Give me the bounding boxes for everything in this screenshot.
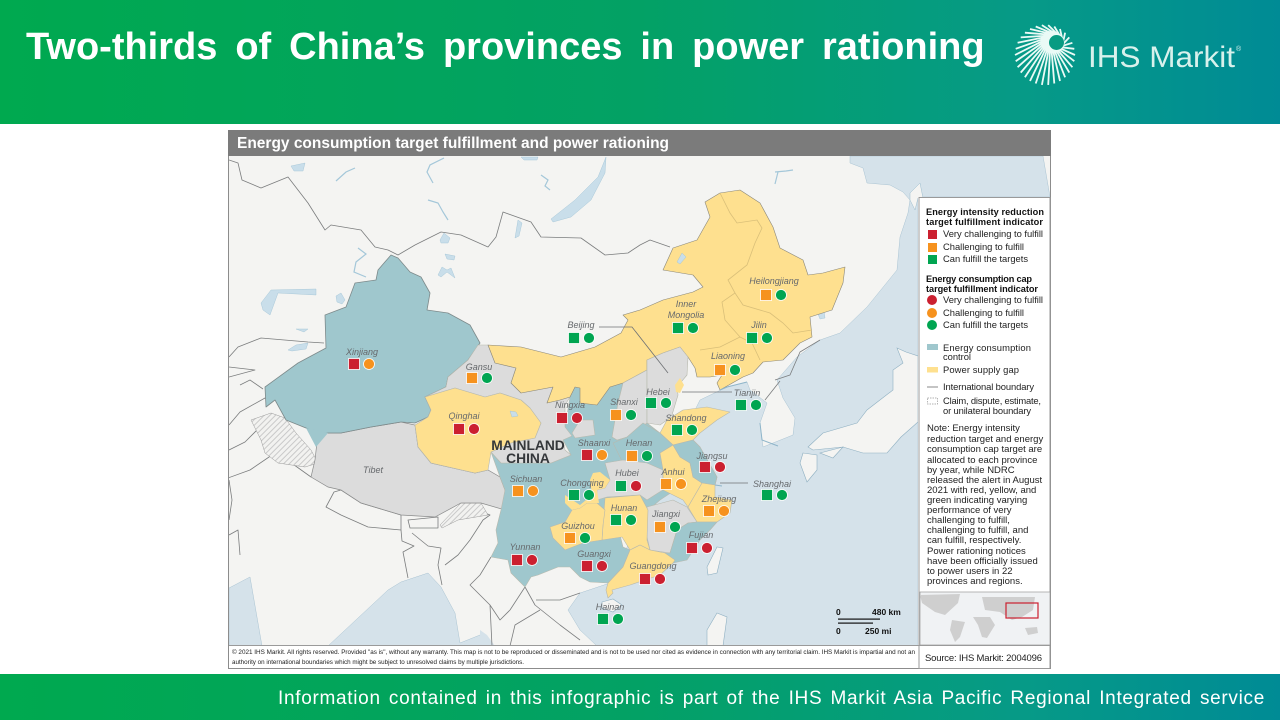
Jiangxi: grey (647, 500, 697, 553)
label: MAINLAND CHINA: MAINLAND (491, 438, 565, 453)
Fujian: teal (665, 522, 717, 563)
copyright note (229, 645, 919, 668)
legend: note: can fulfill, respectively. (927, 535, 1021, 546)
legend: boundaries (927, 381, 1041, 416)
Hainan island (602, 599, 622, 612)
marker: Tianjin (734, 388, 762, 410)
disputed areas hatched (251, 413, 488, 528)
legend: note: performance of very (927, 505, 1012, 516)
legend panel (919, 198, 1050, 668)
legend: energy intensity squares: Challenging to fulfill (943, 241, 1024, 252)
map panel (228, 130, 1051, 668)
Qinghai: yellow (415, 388, 541, 473)
marker: Gansu (466, 362, 492, 384)
Zhejiang: yellow (688, 483, 732, 522)
marker: Inner Mongolia: Mongolia (668, 310, 704, 320)
legend: energy intensity squares: Very challenging to fulfill (943, 228, 1043, 239)
marker: Hainan: Hainan (596, 602, 624, 612)
base map (228, 156, 1051, 646)
marker: Qinghai (448, 411, 481, 434)
Henan: teal (612, 422, 673, 460)
legend: energy intensity squares: target fulfillment indicator (926, 217, 1043, 227)
marker: Xinjiang: Xinjiang (345, 347, 378, 357)
marker: Hainan (596, 602, 624, 624)
legend: area colours: Power supply gap (943, 364, 1019, 375)
footer band (0, 674, 1280, 720)
logo: IHS Markit: IHS Markit (1088, 41, 1236, 74)
source (919, 646, 1050, 664)
legend: note: released the alert in August (927, 475, 1042, 486)
logo: IHS Markit: ® (1236, 45, 1242, 53)
marker: Guangdong (629, 561, 677, 584)
marker: Liaoning: Liaoning (711, 351, 745, 361)
header band (0, 0, 1280, 124)
marker: Shandong: Shandong (665, 413, 707, 423)
legend: note: 2021 with red, yellow, and (927, 485, 1036, 496)
label: Tibet: Tibet (363, 465, 383, 475)
legend: note: challenging to fulfill, and (927, 525, 1028, 536)
legend: note: to power users in 22 (927, 566, 1013, 577)
marker: Guangxi (577, 549, 612, 572)
Guizhou: yellow (550, 503, 605, 550)
marker: Zhejiang: Zhejiang (701, 494, 736, 504)
marker: Shanghai (753, 479, 792, 500)
marker: Shanxi (610, 397, 639, 420)
marker: Hubei (615, 468, 642, 492)
legend: area colours: control (943, 351, 971, 362)
marker: Hebei (646, 387, 672, 408)
legend: energy cap circles: Very challenging to fulfill (943, 294, 1043, 305)
central teal base (491, 383, 717, 587)
legend: energy cap circles: Challenging to fulfill (943, 307, 1024, 318)
marker: Yunnan: Yunnan (510, 542, 540, 552)
marker: Hunan: Hunan (611, 503, 637, 513)
legend: energy cap circles (926, 274, 1043, 330)
legend: note: allocated to each province (927, 455, 1037, 466)
Gulf of Thailand (480, 630, 494, 645)
marker: Hebei: Hebei (646, 387, 671, 397)
Taiwan (707, 547, 723, 575)
legend: energy intensity squares: Can fulfill the targets (943, 253, 1028, 264)
Gansu lobe: grey (572, 420, 595, 438)
label: MAINLAND CHINA: CHINA (506, 451, 550, 466)
scale bar (836, 607, 901, 636)
China provinces (265, 190, 845, 598)
legend: energy intensity squares: Energy intensity reduction (926, 207, 1044, 217)
panel heading bar: Energy consumption target fulfillment and power rationing (237, 135, 669, 152)
label: MAINLAND CHINA (491, 438, 565, 466)
Xinjiang: teal (265, 255, 480, 433)
marker: Jiangsu (695, 451, 728, 472)
Luzon (707, 613, 727, 646)
Aksai Chin teal (306, 428, 328, 447)
marker: Ningxia (555, 400, 585, 424)
Arabian Sea (229, 577, 262, 646)
legend: note: reduction target and energy (927, 434, 1043, 445)
Korea/Bohai coast detail (715, 382, 778, 486)
marker: Fujian: Fujian (689, 530, 713, 540)
marker: Guizhou (561, 521, 595, 544)
marker: Sichuan: Sichuan (510, 474, 542, 484)
locator world map (920, 592, 1050, 645)
legend: note: consumption cap target are (927, 444, 1042, 455)
legend: energy cap circles: Can fulfill the targets (943, 319, 1028, 330)
Tibet: grey (311, 422, 505, 517)
logo: IHS Markit (1015, 25, 1242, 85)
Guangdong: yellow (606, 545, 675, 598)
marker: Qinghai: Qinghai (448, 411, 481, 421)
Northeast province lines (700, 193, 812, 360)
legend: note: Power rationing notices (927, 546, 1026, 557)
marker: Anhui: Anhui (660, 467, 686, 477)
marker: Guangxi: Guangxi (577, 549, 612, 559)
marker: Jiangxi (651, 509, 681, 532)
marker: Guizhou: Guizhou (561, 521, 595, 531)
legend: note: green indicating varying (927, 495, 1027, 506)
Jiangsu: teal (673, 440, 717, 485)
Shandong: yellow (660, 407, 730, 445)
Shanxi: grey (612, 370, 647, 440)
legend: energy intensity squares (926, 207, 1044, 264)
footer text: Information contained in this infographic is part of the IHS Markit Asia Pacific Regional Integrated service (278, 688, 1265, 709)
marker: Gansu: Gansu (466, 362, 492, 372)
marker: Jiangxi: Jiangxi (651, 509, 681, 519)
Bay of Bengal (328, 573, 494, 646)
legend: energy cap circles: target fulfillment indicator (926, 284, 1038, 294)
Hunan: yellow (602, 495, 650, 550)
marker: Shandong (665, 413, 707, 436)
legend: note: challenging to fulfill, (927, 515, 1010, 526)
marker: Guangdong: Guangdong (629, 561, 677, 571)
marker: Inner Mongolia: Inner (676, 299, 697, 309)
marker: Henan (626, 438, 652, 462)
marker: Jilin (746, 320, 772, 344)
Kyushu and Shikoku (800, 447, 843, 482)
marker: Heilongjiang: Heilongjiang (749, 276, 799, 286)
marker: Shanghai: Shanghai (753, 479, 792, 489)
marker: Shanxi: Shanxi (610, 397, 639, 407)
marker: Henan: Henan (626, 438, 652, 448)
marker: Tianjin: Tianjin (734, 388, 760, 398)
marker: Anhui (660, 467, 686, 490)
marker: Inner Mongolia (668, 299, 704, 334)
legend: note: have been officially issued (927, 556, 1038, 567)
marker: Zhejiang (701, 494, 736, 516)
Inner Mongolia and Northeast: yellow (488, 190, 845, 405)
marker: Chongqing: Chongqing (560, 478, 604, 488)
marker: Beijing (567, 320, 595, 344)
marker: Jiangsu: Jiangsu (695, 451, 728, 461)
marker: Shaanxi: Shaanxi (578, 438, 611, 448)
marker: Jilin: Jilin (750, 320, 767, 330)
Hubei: grey (597, 460, 663, 500)
source: Source: IHS Markit: 2004096 (925, 653, 1042, 664)
panel heading bar (228, 130, 1051, 156)
legend: area colours (927, 342, 1031, 375)
scale bar: 250 mi (865, 626, 891, 636)
national boundaries (228, 160, 820, 646)
Hebei: grey (647, 347, 688, 425)
marker: Sichuan (510, 474, 542, 496)
marker: Fujian (686, 530, 713, 554)
copyright note: © 2021 IHS Markit. All rights reserved. Provided "as is", without any warranty. This map is not to be reproduced or disseminated and is not to be used nor cited as evidence in connection with any territorial claim. IHS Markit is impartial and not an (232, 649, 916, 656)
Qinghai lake (510, 411, 518, 417)
Sakhalin north (910, 183, 923, 210)
legend: area colours: Energy consumption (943, 342, 1031, 353)
Gansu: grey (425, 345, 572, 463)
legend: boundaries: Claim, dispute, estimate, (943, 395, 1041, 406)
marker: Ningxia: Ningxia (555, 400, 585, 410)
legend: energy cap circles: Energy consumption cap (926, 274, 1032, 284)
legend: note: Note: Energy intensity (927, 423, 1020, 434)
legend: note: by year, while NDRC (927, 465, 1015, 476)
legend: note (927, 423, 1043, 587)
sea: Pacific (568, 156, 1050, 646)
marker: Shaanxi (578, 438, 611, 460)
Chongqing: yellow part (565, 472, 610, 510)
marker: Beijing: Beijing (567, 320, 595, 330)
marker: Yunnan (510, 542, 540, 566)
marker: Heilongjiang (749, 276, 799, 300)
marker: Liaoning (711, 351, 745, 376)
marker: Hubei: Hubei (615, 468, 640, 478)
Hokkaido and Honshu (808, 348, 918, 453)
marker: Xinjiang (345, 347, 378, 370)
scale bar: 0 (836, 626, 841, 636)
Tianjin: yellow (675, 378, 684, 393)
scale bar: 0 (836, 607, 841, 617)
Inner Mongolia lake (677, 253, 686, 264)
Anhui: yellow (660, 445, 702, 507)
scale bar: 480 km (872, 607, 901, 617)
legend: boundaries: or unilateral boundary (943, 405, 1031, 416)
legend: boundaries: International boundary (943, 381, 1034, 392)
leader lines (599, 327, 748, 483)
title: Two-thirds of China’s provinces in power rationing (26, 26, 985, 68)
lakes and rivers (260, 156, 826, 352)
copyright note: authority on international boundaries which might be subject to unresolved claims by multiple jurisdictions. (232, 659, 524, 666)
legend: note: provinces and regions. (927, 576, 1023, 587)
marker: Chongqing (560, 478, 604, 500)
marker: Hunan (610, 503, 637, 526)
